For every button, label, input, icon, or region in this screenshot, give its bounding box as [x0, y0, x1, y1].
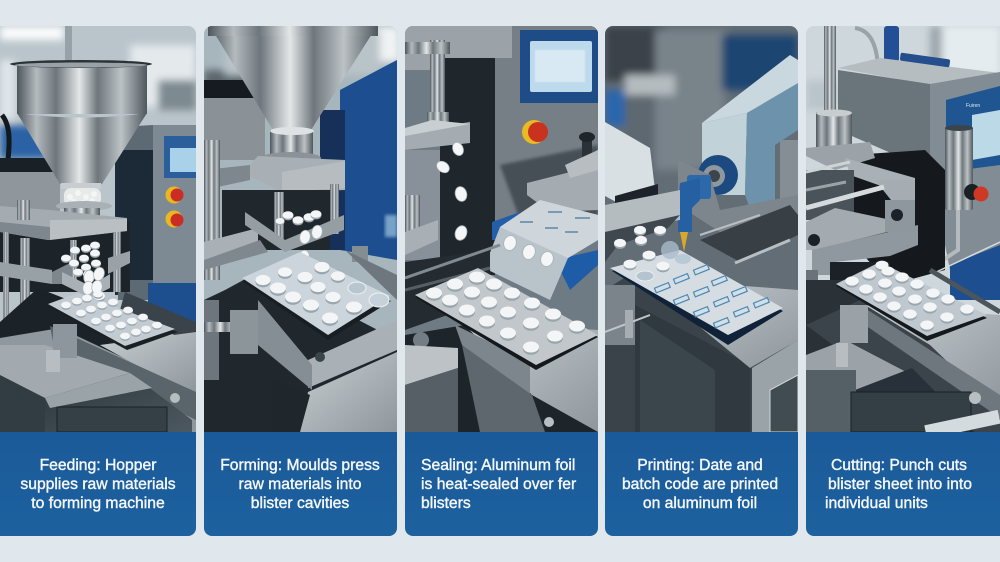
caption: sealing: Sealing: Aluminum foil [421, 457, 575, 474]
hopper [10, 60, 152, 189]
corrugated hose [854, 26, 899, 60]
printer housing [678, 55, 798, 245]
caption: cutting: Cutting: Punch cuts [831, 457, 967, 474]
caption: forming: Forming: Moulds press [220, 457, 380, 474]
cylinder and stop button [945, 125, 988, 261]
large hopper [208, 26, 378, 164]
caption: feeding [0, 432, 196, 536]
caption: printing: Printing: Date and [637, 457, 763, 474]
blue print nozzle [678, 175, 711, 252]
machine background [405, 26, 598, 275]
tablets in chute [61, 242, 106, 302]
foil feed [484, 150, 598, 300]
falling tablets [436, 142, 468, 241]
main housing [838, 53, 1000, 270]
caption: sealing: blisters [421, 495, 471, 512]
panel: sealing [405, 26, 598, 432]
caption: cutting [806, 432, 1000, 536]
caption: printing: batch code are printed [622, 476, 778, 493]
falling and queued tablets [276, 210, 322, 256]
granules in feed neck [64, 188, 101, 202]
blue cabinet [340, 60, 397, 260]
caption: printing: on aluminum foil [643, 495, 757, 512]
rear tablets [614, 226, 666, 249]
rollers and rods [700, 205, 798, 263]
punch column and brackets [806, 26, 945, 305]
white head and support arm [605, 122, 680, 262]
left machine body [0, 158, 130, 292]
panel: cutting [806, 26, 1000, 439]
touch screen panel [520, 30, 598, 103]
press frame [0, 200, 130, 320]
caption: feeding: supplies raw materials [20, 476, 176, 493]
conveyor and table [405, 245, 598, 432]
steel base and table [806, 280, 1000, 439]
caption: feeding: Feeding: Hopper [40, 457, 156, 474]
panel: forming [204, 26, 400, 432]
conveyor table [0, 288, 196, 432]
caption: printing [605, 432, 798, 536]
caption: forming: raw materials into [239, 476, 362, 493]
emergency stop button [522, 120, 595, 160]
press frame [204, 140, 397, 300]
caption: cutting: individual units [825, 495, 928, 512]
panel: feeding [0, 26, 196, 432]
caption: feeding: to forming machine [31, 495, 165, 512]
panel: printing [605, 26, 798, 432]
control cabinet [115, 125, 196, 330]
press shaft and plate [405, 40, 470, 255]
steel base [204, 270, 397, 432]
control panel: Fuiren [966, 103, 980, 109]
sealed blister tray [415, 268, 598, 370]
control panel [946, 86, 1000, 172]
printed blister tray [610, 241, 783, 345]
caption: forming [204, 432, 397, 536]
caption: sealing [405, 432, 598, 536]
blue lower panel and rail [930, 242, 1000, 312]
blister tray [48, 291, 178, 350]
caption: forming: blister cavities [251, 495, 349, 512]
blister tray [242, 252, 391, 340]
caption: cutting: blister sheet into into [828, 476, 972, 493]
steel cabinet [605, 268, 798, 432]
caption: sealing: is heat-sealed over fer [421, 476, 576, 493]
blister tray [836, 261, 987, 341]
